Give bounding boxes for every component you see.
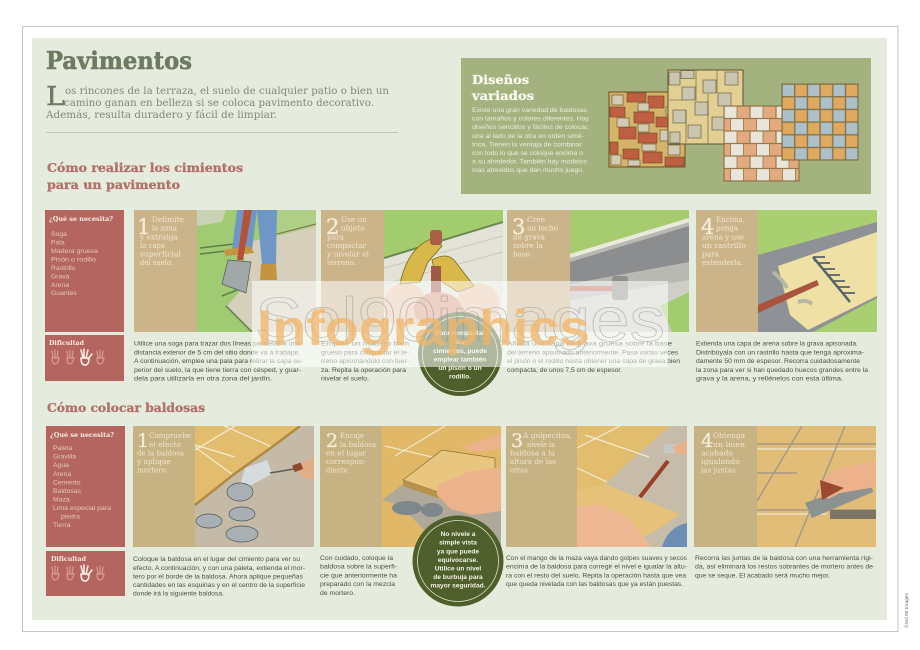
step 2: encaje: en el lugar [326,450,367,458]
text: step 1 (cimientos) [134,340,303,382]
text: step 2 (cimientos): nivelar el suelo. [321,376,369,382]
step 2: encaje: correspon- [326,458,367,466]
text: step 4 (baldosas): da, así eliminará los restos sobrantes de mortero antes de [695,564,873,571]
step 1: compruebe: 1 [137,430,149,452]
text: step 1 (cimientos): Utilice una soga para trazar dos líneas paralelas a una [134,340,300,348]
step 3: cree un lecho: de grava [513,234,545,242]
panel: diseños variados [461,58,871,194]
callout: nivel de burbuja: simple vista [439,540,477,546]
step 2: encaje: la baldosa [340,441,376,449]
step 1: delimite: Delimite [152,216,184,224]
step 4: encima ponga arena: arena y use [702,234,744,242]
text: step 3 (cimientos): Añada una capa de grava gruesa sobre la base [507,340,672,348]
step 1: delimite: la zona [152,224,177,232]
text: step 3 (cimientos): compacta, de unos 7,5 cm de espesor. [507,367,622,374]
text: diseños variados: diseños sencillos y fáciles de colocar, [472,124,589,131]
text: step 4 (cimientos) [696,340,868,382]
step 1: delimite: y extraiga [139,234,178,242]
step 4: encima ponga arena: extenderla. [702,259,743,267]
panel: qué se necesita (baldosas): Maza [53,497,70,504]
text: step 3 (cimientos): del terreno apisonado anteriormente. Pasa varias veces [507,349,679,356]
panel: qué se necesita (cimientos): Arena [51,282,69,289]
text: step 4 (baldosas) [695,555,873,579]
step 2: use un objeto: 2 [326,215,339,239]
step 1: compruebe: el efecto [149,441,181,449]
intro text: os rincones de la terraza, el suelo de cualquier patio o bien un [65,85,389,97]
callout: nivel de burbuja: mayor seguridad. [431,582,486,590]
panel: qué se necesita (baldosas): Arena [53,471,71,478]
text: step 1 (baldosas): Coloque la baldosa en el lugar del cimiento para ver su [133,556,300,563]
text: step 2 (baldosas): Con cuidado, coloque la [320,555,393,562]
step 3: cree un lecho: 3 [512,215,525,239]
text: step 1 (cimientos): distancia exterior de 5 cm del sitio donde va a trabajar. [134,349,300,356]
text: diseños variados: con tamaños y colores diferentes. Hay [472,116,590,123]
text: step 4 (baldosas): Recorra las juntas de la baldosa con una herramienta rígi- [695,555,873,562]
callout: pisón: rodillo. [449,374,471,380]
text: step 2 (baldosas): de mortero. [320,590,355,597]
step 4: encima ponga arena: Encima, [716,216,745,224]
step 3: a golpecitos: otras. [510,466,530,474]
text: step 3 (baldosas): Con el mango de la maza vaya dando golpes suaves y secos [506,555,688,562]
step 4: encima ponga arena: 4 [701,215,714,239]
step 2: use un objeto [321,210,503,332]
step 1: compruebe: de la baldosa [137,450,184,458]
panel: qué se necesita (cimientos): Soga [51,231,67,238]
step 3: a golpecitos: A golpecitos, [522,432,572,440]
step 4: obtenga [694,426,876,547]
text: step 3 (baldosas) [506,555,688,588]
illustration: tamping with a rammer [384,210,503,327]
panel: qué se necesita (baldosas): piedra [61,514,80,521]
text: step 2 (cimientos): Emplee un madero bien [321,340,409,348]
heading: cimientos [47,161,243,192]
credit: ©Sol 90 Images [903,592,910,628]
text: step 2 (cimientos): za. Repita la operación para [321,367,406,374]
step 3: cree un lecho: un lecho [527,224,558,232]
panel: qué se necesita (cimientos): Pisón o rodillo [51,256,96,264]
panel: dificultad (baldosas): Dificultad [51,556,87,563]
step 3: cree un lecho: base. [513,250,532,258]
panel: qué se necesita (cimientos): Guantes [51,290,77,297]
panel: qué se necesita (baldosas) [46,426,125,547]
text: step 1 (baldosas): tero por el borde de la baldosa. Ahora aplique pequeñas [133,574,304,580]
step 4: obtenga: las juntas. [701,466,738,474]
text: step 1 (cimientos): perior del suelo, la que tiene tierra con césped, y guar- [134,367,301,374]
text: step 1 (baldosas) [133,556,305,598]
text: step 1 (baldosas): cantidades en las esquinas y en el centro de la superficie [133,582,305,589]
text: step 1 (cimientos): dela para utilizarla en otra zona del jardín. [134,376,272,382]
step 4: obtenga: igualando [701,458,740,466]
step 1: compruebe: Compruebe [149,432,191,440]
text: step 4 (cimientos): damente 50 mm de espesor. Recorra cuidadosamente [696,358,860,365]
panel: dificultad (baldosas) [46,551,125,596]
callout: pisón [418,312,502,396]
text: step 1 (baldosas): donde irá la siguiente baldosa. [133,590,224,598]
callout: nivel de burbuja: de burbuja para [433,574,483,581]
step 4: obtenga: Obtenga [713,432,745,440]
panel: qué se necesita (cimientos): ¿Qué se necesita? [49,216,113,223]
text: diseños variados: trica. Tienen la ventaja de combinar [472,141,582,148]
step 1: delimite: la capa [140,242,165,250]
step 1: delimite: superficial [140,250,182,258]
text: step 2 (cimientos) [321,340,409,382]
heading: baldosas: Cómo colocar baldosas [47,401,205,415]
tile sample: red mosaic [609,92,685,167]
step 2: use un objeto: objeto [341,224,365,232]
step 3: a golpecitos: nivele la [527,441,555,449]
text: diseños variados [472,107,590,174]
intro text: L [46,82,65,112]
step 2: encaje [320,426,501,547]
text: step 4 (baldosas): que se seque. El acabado será mucho mejor. [695,572,830,579]
panel: qué se necesita (cimientos): Rastrillo [51,265,76,272]
text: step 1 (cimientos): A continuación, emplee una pala para retirar la capa su- [134,358,303,365]
title: Pavimentos [46,46,192,75]
illustration: fitting the tile [382,426,501,547]
step 1: compruebe: mortero [137,466,166,474]
callout: nivel de burbuja [412,516,504,606]
step 1: delimite [134,210,316,332]
callout: nivel de burbuja: equivocarse. [438,557,478,564]
step 2: encaje: 2 [326,430,338,452]
step 1: delimite: del suelo. [140,259,173,267]
step 1: compruebe [133,425,314,547]
text: diseños variados: con todo lo que se coloque encima o [472,150,584,157]
text: step 2 (cimientos): rreno apisonándolo con fuer- [321,358,409,365]
callout: pisón: los [455,339,465,346]
text: step 4 (cimientos): la zona para ver si han quedado huecos grandes entre la [696,367,868,374]
text: step 2 (baldosas): preparado con la mezcla [320,581,395,588]
panel: qué se necesita (cimientos): Madera gruesa [51,248,98,255]
step 2: use un objeto: para [327,234,344,242]
tile sample: orange and white bond [724,106,799,181]
illustration: digging with a spade [197,210,316,332]
intro text: Además, resulta duradero y fácil de limpiar. [45,109,277,121]
illustration: raking the sand [758,210,877,332]
text: step 2 (baldosas) [320,555,397,597]
panel: dificultad (cimientos): Dificultad [49,340,85,347]
panel: qué se necesita (baldosas): Paleta [53,445,72,452]
text: step 2 (baldosas): cie que anteriormente ha [320,572,397,579]
icon: difficulty hands [52,565,104,581]
intro text: camino ganan en belleza si se coloca pavimento decorativo. [64,97,374,109]
step 1: delimite: 1 [137,215,150,239]
step 3: a golpecitos: 3 [511,430,523,452]
callout: pisón: un pisón o un [438,365,482,372]
text: step 3 (cimientos): el pisón o el rodillo hasta obtener una capa de grava bien [507,358,680,365]
watermark: Infographics [257,300,590,356]
step 2: use un objeto: Use un [341,216,367,224]
step 4: encima ponga arena [696,210,877,332]
text: diseños variados: una al lado de la otra en orden simé- [472,133,584,140]
step 2: encaje: diente. [326,466,350,474]
step 4: encima ponga arena: ponga [716,224,738,232]
heading: cimientos: Cómo realizar los cimientos [47,161,243,175]
heading: diseños variados: variados [471,89,534,103]
callout: pisón: cimientos, puede [433,348,487,355]
step 1: compruebe: y aplique [136,458,171,466]
illustration: levelling with a mallet [577,426,687,547]
step 4: obtenga: 4 [701,430,713,452]
text: diseños variados: más atrevidos que dan mucho juego. [472,167,584,174]
callout: pisón: Para compactar [435,330,485,337]
tile sample: blue and orange check [782,84,858,160]
panel: qué se necesita (cimientos): Pala [51,240,65,247]
panel: qué se necesita (baldosas): Lima especial para [53,505,111,512]
callout: nivel de burbuja: Utilice un nivel [435,566,481,572]
intro text [45,82,389,121]
text: step 3 (baldosas): que queda nivelada con las baldosas que ya están puestas. [506,581,683,588]
callout: nivel de burbuja: No nivele a [441,531,476,538]
heading: diseños variados: Diseños [472,73,529,87]
illustration: finishing the joints [757,426,876,547]
panel: qué se necesita (cimientos) [45,210,124,332]
callout: nivel de burbuja: ya que puede [437,548,479,556]
step 2: use un objeto: terreno. [327,259,356,267]
heading: cimientos: para un pavimento [47,178,180,192]
panel: qué se necesita (baldosas): ¿Qué se necesita? [50,432,114,439]
text: step 4 (cimientos): Extienda una capa de arena sobre la grava apisonada. [696,340,858,348]
step 2: encaje: Encaje [340,432,364,440]
step 4: obtenga: un buen [713,441,746,449]
step 3: a golpecitos [506,426,687,547]
step 3: a golpecitos: altura de las [510,458,556,466]
step 4: obtenga: acabado [701,450,733,458]
step 4: encima ponga arena: para [702,250,719,258]
panel: dificultad (cimientos) [45,335,124,381]
panel: qué se necesita (baldosas): Agua [53,462,69,469]
text: step 3 (baldosas): encima de la baldosa para corregir el nivel e igualar la altu- [506,564,687,571]
panel: qué se necesita (cimientos): Grava [51,274,70,280]
text: step 4 (cimientos): grava y la arena, y rellénelos con esta última. [696,376,843,382]
text: diseños variados: a su alrededor. También hay modelos [472,159,587,166]
panel: qué se necesita (baldosas): Gravilla [53,454,76,461]
panel: qué se necesita (baldosas): Cemento [53,480,81,487]
illustration: applying mortar [195,426,314,547]
step 3: cree un lecho: Cree [527,216,545,224]
step 3: cree un lecho: sobre la [513,242,543,250]
text: step 2 (cimientos): grueso para compactar el te- [321,349,409,356]
step 3: cree un lecho [507,210,689,332]
callout: pisón: emplear también [434,356,486,364]
panel: qué se necesita (baldosas): Baldosas [53,488,82,495]
heading: diseños variados [471,73,534,103]
text: step 3 (baldosas): ra con el resto del suelo. Repita la operación hasta que vea [506,572,686,579]
text: step 1 (baldosas): efecto. A continuación, y con una paleta, extienda el mor- [133,565,305,572]
panel: qué se necesita (baldosas): Tierra [53,522,71,529]
watermark [252,281,668,367]
text: step 4 (cimientos): Distribúyala con un rastrillo hasta que tenga aproxima- [696,349,864,356]
text: step 2 (baldosas): baldosa sobre la superfi- [320,564,397,571]
illustration: spreading gravel [570,210,689,332]
step 4: encima ponga arena: un rastrillo [702,242,746,250]
text: step 3 (cimientos) [507,340,680,374]
icon: difficulty hands [52,349,104,365]
step 3: a golpecitos: baldosa a la [510,450,555,458]
watermark: Sol90images [255,286,665,355]
text: diseños variados: Existe una gran variedad de baldosas [472,107,587,114]
step 2: use un objeto: compactar [327,242,367,250]
tile sample: stone mosaic [668,70,743,144]
step 2: use un objeto: y nivelar el [326,250,370,258]
